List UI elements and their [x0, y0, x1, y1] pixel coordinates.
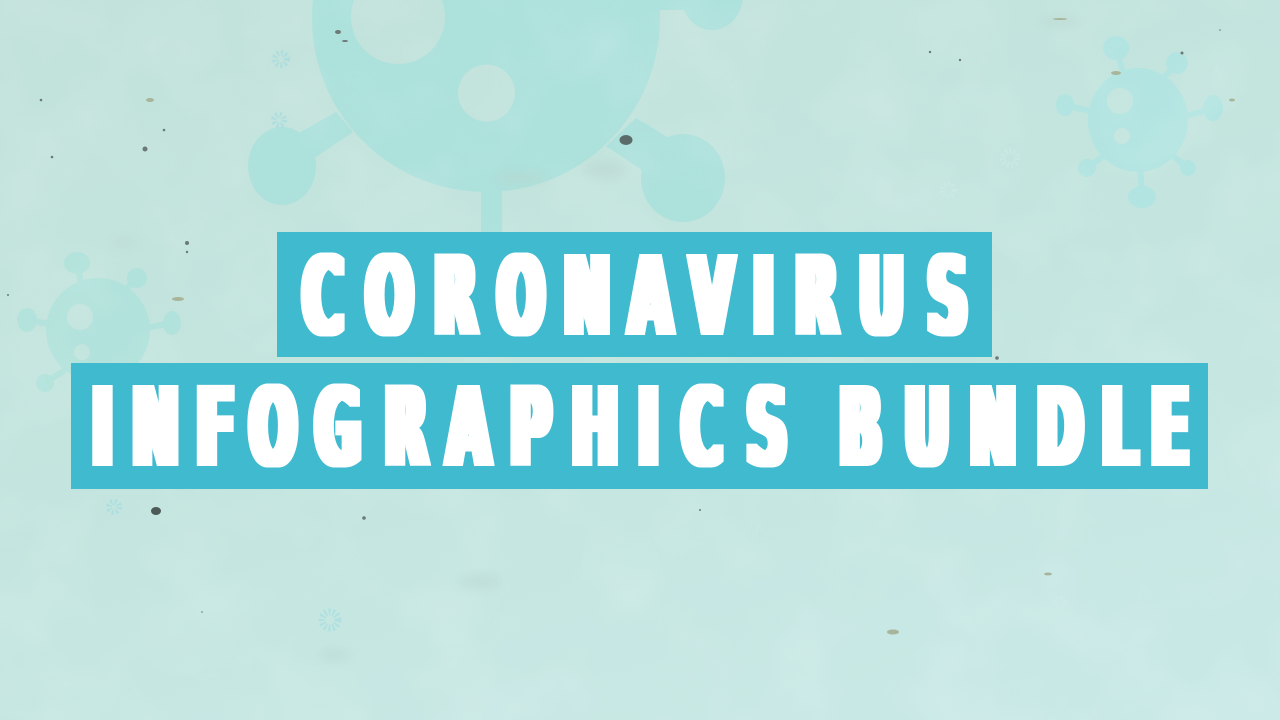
speckles: [7, 29, 1221, 613]
heading text: [92, 232, 1189, 492]
title band: coronavirus: [277, 232, 992, 357]
icon: virus top right: [1056, 36, 1223, 208]
heading line 1: CORONAVIRUS: [303, 232, 967, 361]
title: [71, 232, 1208, 492]
icon: virus left: [17, 252, 181, 392]
title band: infographics bundle: [71, 363, 1208, 489]
olive flecks: [146, 18, 1235, 634]
icon: large virus top centre: [248, 0, 743, 232]
soft grey stains: [111, 17, 1082, 661]
heading line 2: INFOGRAPHICS BUNDLE: [92, 363, 1189, 492]
faint pale virus marks: [942, 151, 1065, 608]
small snowflake-like virus marks: [109, 53, 338, 628]
